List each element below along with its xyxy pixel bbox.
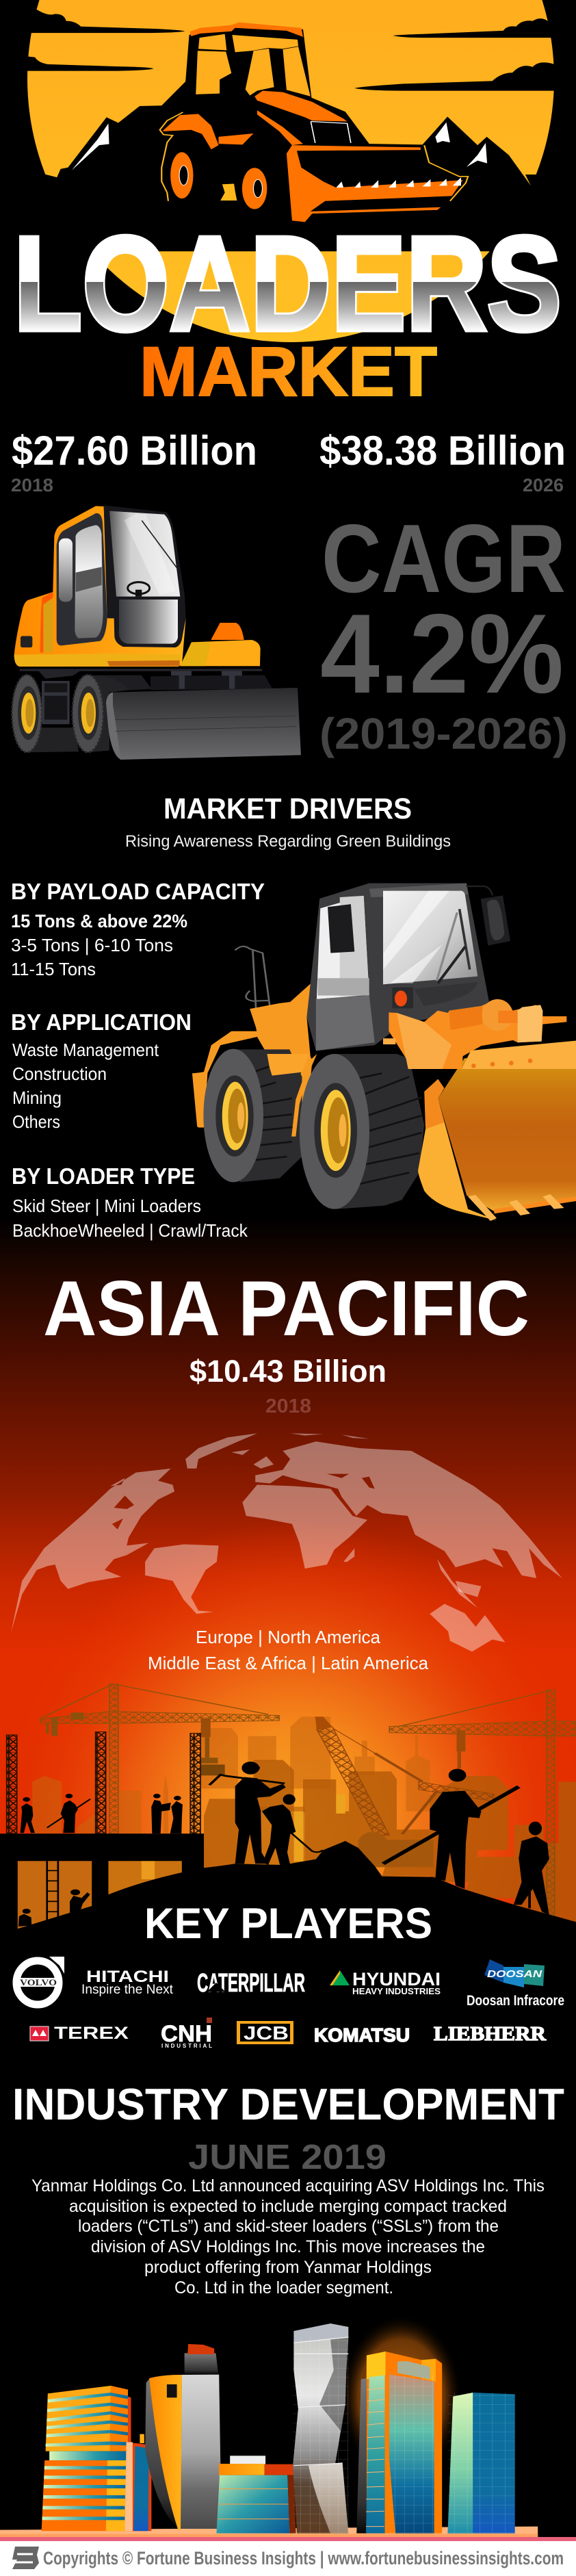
logo: Volvo: VOLVO xyxy=(20,1977,57,1987)
stat: 2018 market value: 2018 xyxy=(11,475,53,495)
panel: by payload capacity: 15 Tons & above 22% xyxy=(11,911,187,931)
stat: CAGR 4.2%: (2019-2026) xyxy=(319,709,568,758)
panel: by loader type: BackhoeWheeled | Crawl/Track xyxy=(12,1220,248,1241)
logo: Caterpillar xyxy=(197,1969,305,1998)
logo: JCB xyxy=(237,2021,293,2044)
bucket xyxy=(438,1042,576,1211)
logo: Hyundai Heavy Industries: HEAVY INDUSTRIES xyxy=(352,1986,441,1996)
illustration: city skyline xyxy=(0,2315,538,2538)
regions list: Europe | North America xyxy=(196,1627,381,1647)
stat: 2026 market value xyxy=(319,428,566,495)
text block: development description: loaders (“CTLs”) and skid-steer loaders (“SSLs”) from the xyxy=(78,2217,499,2236)
text block: development description: division of ASV Holdings Inc. This move increases the xyxy=(91,2237,485,2256)
logo: Terex xyxy=(30,2024,129,2043)
logo: CNH Industrial: INDUSTRIAL xyxy=(161,2043,212,2049)
panel: by application: Construction xyxy=(12,1064,107,1084)
panel: by loader type xyxy=(12,1163,248,1241)
stat: 2026 market value: $38.38 Billion xyxy=(319,428,566,474)
logo: Doosan Infracore: DOOSAN xyxy=(487,1968,542,1980)
panel: by payload capacity: 11-15 Tons xyxy=(11,959,96,979)
logo: Hitachi: Inspire the Next xyxy=(81,1983,174,1997)
heading: Asia Pacific xyxy=(43,1265,529,1417)
panel: by payload capacity: BY PAYLOAD CAPACITY xyxy=(11,879,265,904)
stat: 2018 market value: $27.60 Billion xyxy=(12,428,257,474)
logo: Komatsu: KOMATSU xyxy=(314,2024,410,2046)
panel: by application: Mining xyxy=(12,1087,62,1108)
background gradient: black to red-orange xyxy=(0,1218,576,1656)
logo: Liebherr: LIEBHERR xyxy=(434,2023,547,2045)
orange wedge tower xyxy=(145,2344,222,2530)
platform and hill xyxy=(0,1833,576,1946)
lattice towers xyxy=(7,1732,200,1833)
stat: CAGR 4.2%: 4.2% xyxy=(320,591,564,717)
windshield frame xyxy=(104,505,186,647)
panel: by loader type: BY LOADER TYPE xyxy=(12,1163,195,1189)
heading: market drivers: MARKET DRIVERS xyxy=(163,793,412,825)
heading: Asia Pacific: $10.43 Billion xyxy=(189,1354,387,1389)
heading: industry development: INDUSTRY DEVELOPMENT xyxy=(12,2079,564,2129)
text block: development description: Yanmar Holdings Co. Ltd announced acquiring ASV Holdings Inc. This xyxy=(31,2176,545,2195)
cranes xyxy=(40,1684,576,1916)
heading: Asia Pacific: ASIA PACIFIC xyxy=(43,1265,529,1352)
glow behind tower xyxy=(340,2315,462,2481)
twisted glass tower xyxy=(293,2323,349,2534)
snow caps xyxy=(72,123,487,188)
scene background base xyxy=(0,1656,576,1937)
small workers xyxy=(18,1794,183,1927)
date: June 2019: JUNE 2019 xyxy=(188,2137,387,2176)
logo: Terex: TEREX xyxy=(54,2024,129,2043)
yellow highlights xyxy=(160,112,468,201)
heading: market drivers xyxy=(125,793,451,851)
side door xyxy=(57,513,107,645)
text block: development description: Co. Ltd in the loader segment. xyxy=(174,2278,393,2297)
title: LOADERS xyxy=(19,234,560,334)
footer band xyxy=(0,2537,576,2576)
handrail xyxy=(235,946,276,1049)
logo: Hyundai Heavy Industries: HYUNDAI xyxy=(352,1969,441,1989)
orange body panels xyxy=(162,23,463,222)
text block: development description: product offering from Yanmar Holdings xyxy=(144,2258,432,2277)
body panels xyxy=(193,983,312,1140)
stat: CAGR 4.2% xyxy=(319,504,568,758)
subtitle: MARKET: MARKET xyxy=(140,333,437,411)
heading: Asia Pacific: 2018 xyxy=(265,1395,311,1417)
logo: Doosan Infracore xyxy=(467,1959,564,2009)
rear hood xyxy=(180,640,261,666)
low teal building xyxy=(216,2456,296,2534)
scene background glow xyxy=(0,1519,576,1937)
panel: by application: BY APPLICATION xyxy=(11,1009,192,1035)
regions list xyxy=(148,1627,429,1673)
panel: by application: Waste Management xyxy=(12,1040,159,1060)
clouds xyxy=(18,8,573,91)
wheels xyxy=(192,1042,576,1221)
stat: 2018 market value xyxy=(11,428,257,495)
logo: Volvo xyxy=(15,1957,64,2005)
rear tyres and chassis xyxy=(96,675,152,691)
orange glass tower xyxy=(356,2352,442,2534)
regions list: Middle East & Africa | Latin America xyxy=(148,1653,429,1673)
world map globe xyxy=(11,1433,562,1651)
panel: by payload capacity: 3-5 Tons | 6-10 Tons xyxy=(11,935,173,955)
ladder xyxy=(47,1861,58,1921)
stat: 2026 market value: 2026 xyxy=(523,475,564,495)
large workers xyxy=(209,1762,549,1915)
ground xyxy=(0,2527,538,2538)
cab xyxy=(306,884,490,1051)
skyline xyxy=(32,1716,430,1833)
cab body xyxy=(14,506,186,667)
panel: by loader type: Skid Steer | Mini Loaders xyxy=(12,1196,201,1216)
heading: market drivers: Rising Awareness Regarding Green Buildings xyxy=(125,832,451,851)
heading: key players: KEY PLAYERS xyxy=(144,1900,432,1948)
logo: JCB: JCB xyxy=(244,2022,289,2044)
panel: by application xyxy=(11,1009,192,1132)
logo: Hitachi xyxy=(81,1968,174,1997)
wheel hubs xyxy=(179,166,188,185)
crawler crane xyxy=(315,1716,494,1867)
illustration: sun and tractor loader header xyxy=(0,0,576,342)
striped block building xyxy=(42,2386,151,2531)
cab front detail and hydraulics xyxy=(383,886,510,1008)
panel: by payload capacity xyxy=(11,879,265,979)
logo: Hyundai Heavy Industries xyxy=(330,1969,441,1996)
text block: development description: acquisition is expected to include merging compact tracked xyxy=(69,2197,507,2216)
windshield outline xyxy=(311,121,351,143)
illustration: wheeled excavator with blade xyxy=(12,505,301,760)
blue glass tower xyxy=(447,2393,515,2534)
sun disc xyxy=(27,0,554,342)
icon: Fortune Business Insights logo xyxy=(12,2547,39,2569)
illustration: construction site silhouettes xyxy=(0,1684,576,1946)
logo: Hitachi: HITACHI xyxy=(86,1968,169,1986)
blade xyxy=(106,688,301,760)
illustration: front wheel loader with bucket xyxy=(192,884,576,1221)
logo: CNH Industrial: CNH xyxy=(161,2021,212,2047)
mountains and tractor silhouette xyxy=(0,25,576,251)
panel: by application: Others xyxy=(12,1111,60,1132)
wheels xyxy=(27,727,79,752)
cab windows showing sun xyxy=(196,34,311,96)
logo: Caterpillar: CATERPILLAR xyxy=(197,1969,305,1998)
text block: development description xyxy=(31,2176,545,2297)
